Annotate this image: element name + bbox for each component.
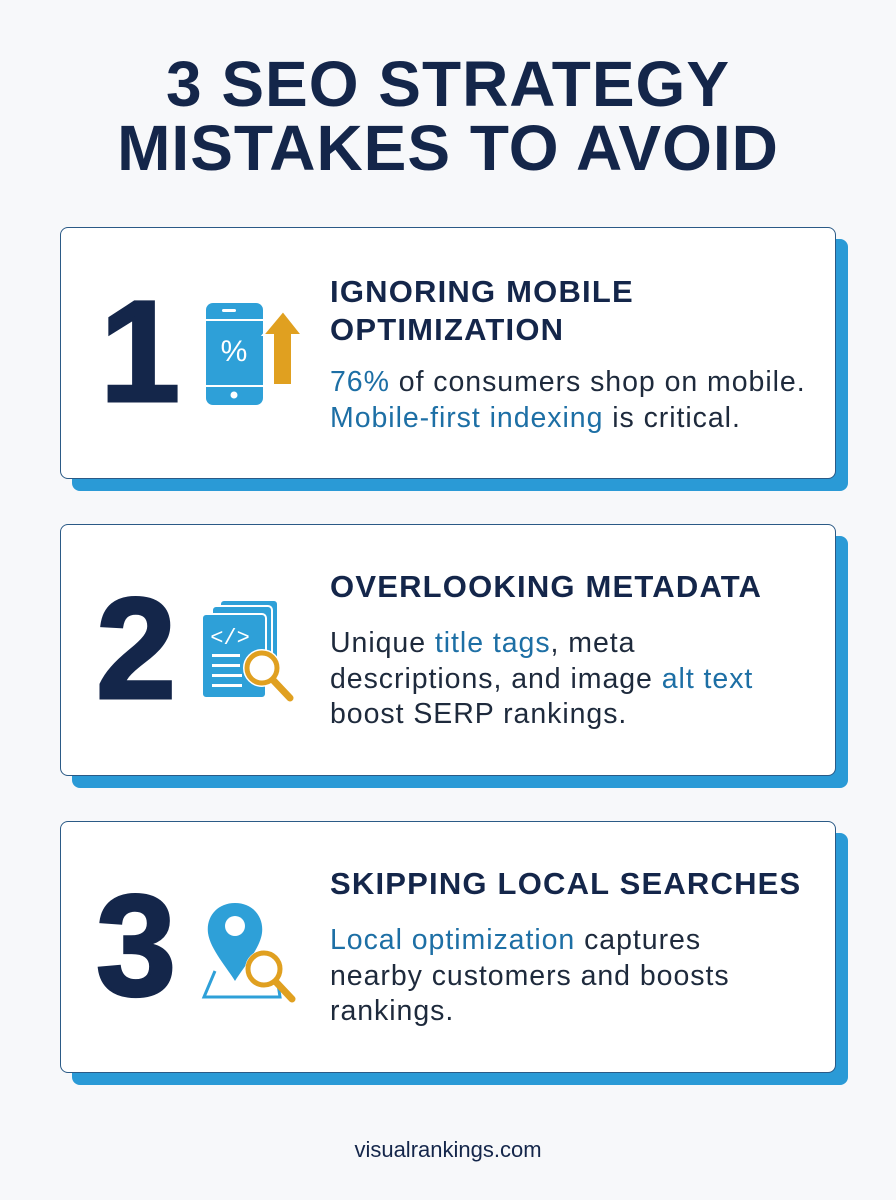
body text: Local optimization captures bbox=[330, 924, 701, 956]
icon: mobile with arrow bbox=[206, 303, 300, 405]
icon: mobile with arrow: % bbox=[221, 335, 247, 368]
heading: OVERLOOKING METADATA bbox=[330, 569, 762, 604]
icon: location pin with magnifier bbox=[202, 903, 296, 1002]
body text bbox=[330, 366, 806, 434]
body text: rankings. bbox=[330, 995, 454, 1027]
number 2: 2 bbox=[96, 568, 176, 729]
body text: descriptions, and image alt text bbox=[330, 662, 753, 694]
icon: documents with magnifier bbox=[203, 601, 294, 702]
number 1: 1 bbox=[100, 271, 180, 432]
panel: card 2 bbox=[60, 524, 848, 788]
footer: visualrankings.com bbox=[354, 1137, 542, 1162]
panel: card 1 bbox=[60, 227, 848, 491]
icon: documents with magnifier: </> bbox=[210, 626, 250, 651]
body text bbox=[330, 627, 753, 730]
heading: SKIPPING LOCAL SEARCHES bbox=[330, 866, 801, 901]
title: MISTAKES TO AVOID bbox=[117, 112, 779, 184]
heading: OPTIMIZATION bbox=[330, 312, 564, 347]
body text bbox=[330, 924, 730, 1027]
heading bbox=[330, 274, 634, 347]
number 3: 3 bbox=[96, 865, 176, 1026]
body text: nearby customers and boosts bbox=[330, 960, 730, 992]
body text: 76% of consumers shop on mobile. bbox=[330, 366, 806, 398]
body text: boost SERP rankings. bbox=[330, 698, 627, 730]
body text: Unique title tags, meta bbox=[330, 627, 635, 659]
title bbox=[117, 48, 779, 184]
body text: Mobile-first indexing is critical. bbox=[330, 402, 741, 434]
title: 3 SEO STRATEGY bbox=[166, 48, 730, 120]
heading: IGNORING MOBILE bbox=[330, 274, 634, 309]
panel: card 3 bbox=[60, 821, 848, 1085]
